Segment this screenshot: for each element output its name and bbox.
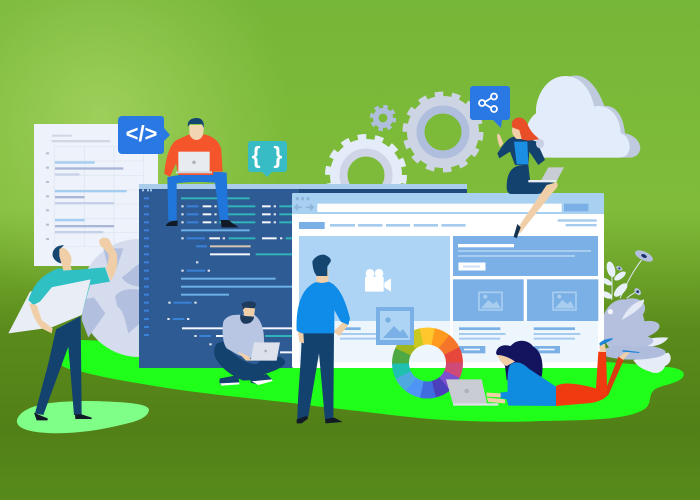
sweater xyxy=(500,362,556,406)
hands xyxy=(487,393,505,403)
plant white leaves xyxy=(600,261,630,300)
hair xyxy=(512,117,539,141)
green ground blob xyxy=(60,340,684,422)
navigation xyxy=(330,219,597,227)
shoes xyxy=(219,374,273,386)
trousers xyxy=(214,342,285,381)
map sheet xyxy=(8,279,91,333)
face xyxy=(189,125,204,140)
person: man sitting with laptop on top of panel xyxy=(164,118,239,227)
laptop xyxy=(176,152,212,173)
face xyxy=(242,307,255,317)
arm raised xyxy=(99,237,117,281)
bubble: curly braces xyxy=(248,141,287,177)
shirt xyxy=(164,134,223,177)
laptop xyxy=(528,167,564,182)
plant feather xyxy=(622,299,644,320)
hair xyxy=(496,341,543,382)
face xyxy=(58,248,72,271)
jacket xyxy=(497,137,545,165)
beard xyxy=(240,314,254,324)
sweater xyxy=(223,314,265,358)
trousers xyxy=(35,316,82,415)
person: woman sitting on browser xyxy=(497,117,564,238)
hair xyxy=(312,255,331,276)
browser window xyxy=(292,193,604,368)
hair xyxy=(53,245,64,263)
picture frame icon xyxy=(376,307,414,345)
person: standing man in blue shirt xyxy=(297,255,350,423)
icon: video camera xyxy=(365,269,391,292)
top xyxy=(514,142,528,164)
code editor panel xyxy=(139,184,467,368)
plant stems xyxy=(612,260,642,300)
colour wheel xyxy=(382,317,473,409)
small gear xyxy=(372,106,394,130)
bubble: code tag: </> xyxy=(126,121,157,146)
shirt xyxy=(40,267,110,315)
shoes xyxy=(34,413,92,420)
sleeve xyxy=(28,277,55,305)
shirt xyxy=(297,282,350,333)
plant xyxy=(600,248,671,373)
back and forward arrows xyxy=(295,204,313,210)
hair xyxy=(242,301,256,310)
medium gear xyxy=(328,138,404,212)
card left xyxy=(453,279,524,321)
face xyxy=(497,355,515,366)
bubble: share xyxy=(470,86,510,128)
lower page section xyxy=(299,321,598,362)
laptop xyxy=(446,379,498,406)
face xyxy=(512,127,522,139)
cup xyxy=(536,139,544,148)
hero left xyxy=(299,236,450,321)
large gear xyxy=(406,94,480,170)
trousers xyxy=(297,332,334,420)
hand xyxy=(497,133,503,147)
person: seated man with beard xyxy=(214,301,285,386)
plant flowers xyxy=(615,248,655,296)
hands xyxy=(298,323,348,343)
person: woman lying with laptop xyxy=(446,338,639,406)
cloud xyxy=(525,75,640,158)
near leg and trousers xyxy=(556,352,607,406)
document sheet xyxy=(34,124,158,266)
hair xyxy=(188,118,204,128)
window buttons xyxy=(296,197,310,200)
feet xyxy=(599,344,630,360)
skirt xyxy=(507,165,554,194)
plant pale lobe xyxy=(637,337,668,347)
card text left xyxy=(459,327,506,353)
trousers xyxy=(167,172,228,221)
bubble: code tag xyxy=(118,116,170,154)
far leg xyxy=(602,357,624,400)
card text right xyxy=(534,327,580,353)
plant pot xyxy=(633,353,671,373)
leg xyxy=(516,182,558,233)
laptop xyxy=(251,342,280,361)
hero text lines xyxy=(340,327,377,340)
person: man holding map xyxy=(8,237,117,420)
shoes xyxy=(599,338,639,353)
globe xyxy=(80,239,198,357)
shoes xyxy=(297,416,343,423)
neck xyxy=(316,270,328,283)
shoe xyxy=(514,224,521,238)
card right xyxy=(527,279,598,321)
address bar xyxy=(317,204,562,212)
bubble: curly braces: { } xyxy=(252,142,282,168)
hero right xyxy=(453,236,598,276)
shoes xyxy=(166,220,239,227)
light green ground blob xyxy=(17,401,149,433)
arm lower xyxy=(29,303,53,333)
hand xyxy=(237,352,252,361)
plant lilac leaves xyxy=(601,295,666,360)
